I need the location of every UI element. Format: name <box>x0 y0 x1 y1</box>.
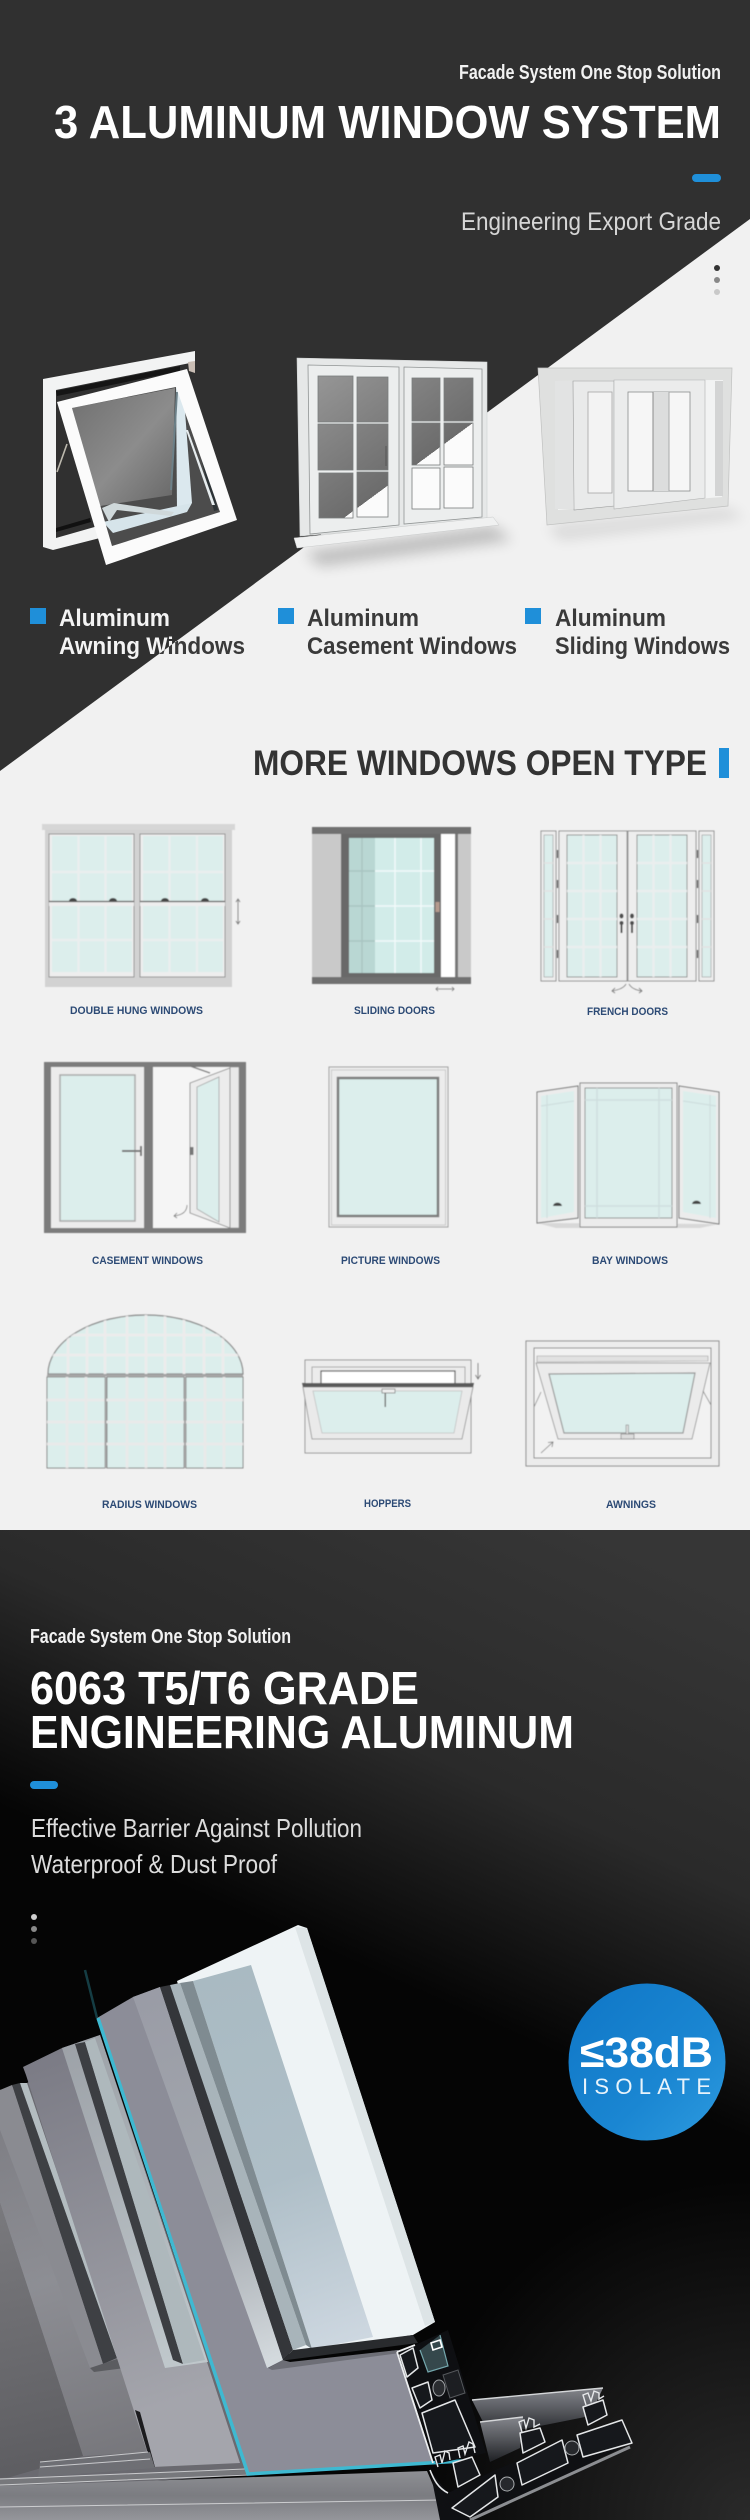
heading: more windows: MORE WINDOWS OPEN TYPE <box>253 744 707 783</box>
label: french doors: FRENCH DOORS <box>587 1006 668 1018</box>
illustration: aluminum profile <box>0 1925 632 2520</box>
title: aluminum grade: 6063 T5/T6 GRADE <box>30 1662 419 1714</box>
main sash frame <box>97 1981 433 2473</box>
title: 3 ALUMINUM WINDOW SYSTEM <box>54 96 721 148</box>
label: bay windows: BAY WINDOWS <box>592 1255 668 1267</box>
heading: bottom tagline: Facade System One Stop Solution <box>30 1626 291 1648</box>
item: sliding <box>525 605 730 660</box>
bottom track <box>0 2452 448 2520</box>
thermal break highlight <box>85 1970 462 2474</box>
diagram: radius windows <box>47 1315 243 1468</box>
label: radius windows: RADIUS WINDOWS <box>102 1499 197 1511</box>
right sash <box>614 380 705 509</box>
cross-section lower <box>430 2391 632 2520</box>
diagram: sliding doors <box>312 827 471 991</box>
subtitle: Engineering Export Grade <box>461 208 721 236</box>
photo: casement window <box>294 358 512 566</box>
diagram: casement windows <box>44 1062 246 1233</box>
diagram: double hung windows <box>42 824 240 987</box>
sash <box>57 369 237 565</box>
item: awning: Aluminum <box>59 605 170 632</box>
badge: sound isolation <box>568 1984 726 2140</box>
photo: sliding window <box>538 368 745 540</box>
description text: Waterproof & Dust Proof <box>31 1849 278 1879</box>
item: casement <box>278 605 517 660</box>
pagination dots <box>714 265 720 295</box>
accent pill <box>692 174 721 182</box>
heading accent bar <box>719 748 729 778</box>
item: casement: Casement Windows <box>307 633 517 660</box>
glass panes <box>318 376 473 518</box>
title: aluminum grade: ENGINEERING ALUMINUM <box>30 1706 574 1758</box>
title: aluminum grade <box>30 1662 574 1758</box>
second sash <box>23 2035 240 2467</box>
label: awnings: AWNINGS <box>606 1499 656 1511</box>
diagram: bay windows <box>537 1083 719 1228</box>
item: sliding: Sliding Windows <box>555 633 730 660</box>
description text: Effective Barrier Against Pollution <box>31 1813 362 1843</box>
left sash <box>573 381 614 510</box>
item: sliding: Aluminum <box>555 605 666 632</box>
label: sliding doors: SLIDING DOORS <box>354 1005 435 1017</box>
badge: sound isolation: ISOLATE <box>582 2074 711 2099</box>
photo: awning window <box>43 351 237 565</box>
item: awning: Awning Windows <box>59 633 245 660</box>
panel: bottom dark section <box>0 1530 750 2520</box>
cross-section upper <box>397 2330 486 2464</box>
item: awning <box>30 605 245 660</box>
diagram: awnings <box>526 1341 719 1466</box>
label: hoppers: HOPPERS <box>364 1498 411 1510</box>
label: casement windows: CASEMENT WINDOWS <box>92 1255 203 1267</box>
diagram: picture windows <box>329 1067 448 1227</box>
panel: top hero background <box>0 0 750 1530</box>
rear track extrusions <box>472 2388 603 2462</box>
label: picture windows: PICTURE WINDOWS <box>341 1255 440 1267</box>
diagram: french doors <box>541 831 714 993</box>
list: three window systems <box>30 605 730 660</box>
badge: sound isolation: ≤38dB <box>580 2029 713 2077</box>
description text <box>31 1813 362 1879</box>
item: casement: Aluminum <box>307 605 419 632</box>
third sash <box>0 2035 248 2490</box>
glass panel <box>177 1925 435 2354</box>
diagram: hoppers <box>302 1360 480 1453</box>
accent pill <box>30 1781 58 1789</box>
label: double hung windows: DOUBLE HUNG WINDOWS <box>70 1005 203 1017</box>
pagination dots <box>31 1914 37 1944</box>
